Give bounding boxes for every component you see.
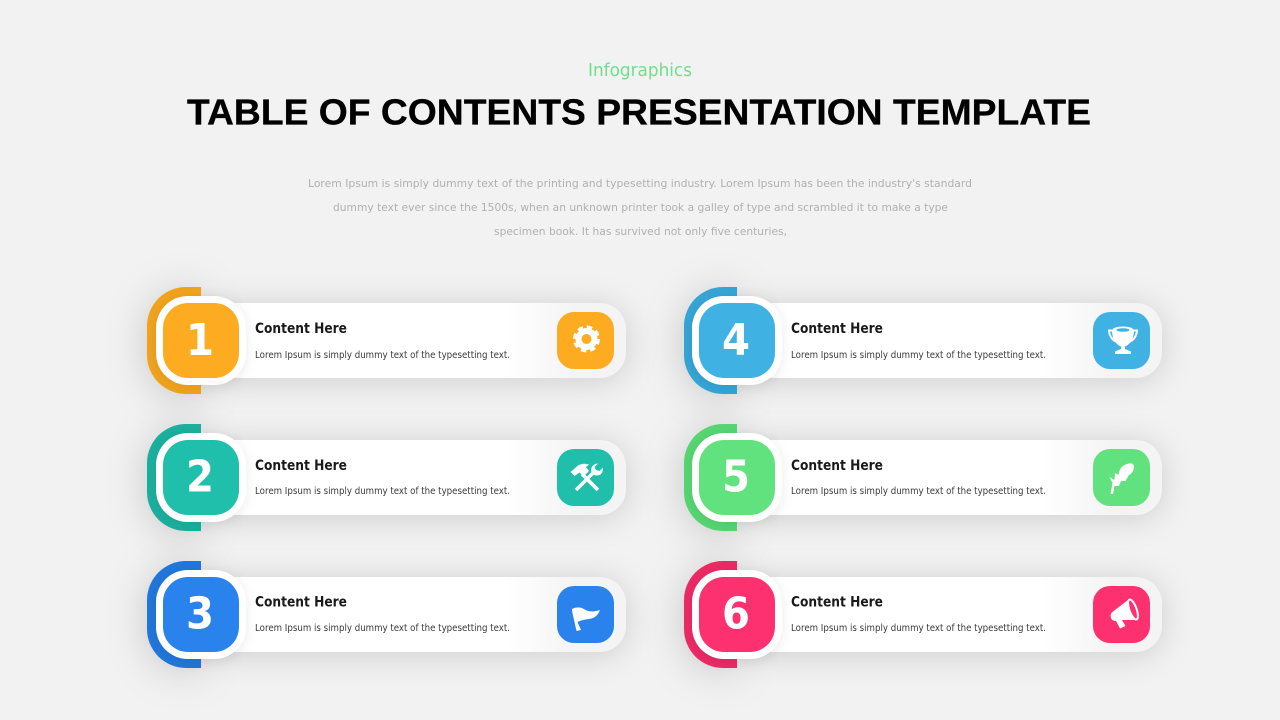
- description 2: Lorem Ipsum is simply dummy text of the typesetting text.: [255, 486, 510, 497]
- panel: item 6: [684, 561, 1162, 668]
- intro paragraph: Lorem Ipsum is simply dummy text of the printing and typesetting industry. Lorem Ipsum has been the industry's standard: [308, 177, 972, 190]
- card 6 background: [736, 577, 1162, 652]
- heading 2: Content Here: [255, 458, 347, 474]
- intro paragraph: specimen book. It has survived not only five centuries,: [494, 225, 787, 238]
- card 5 background: [736, 440, 1162, 515]
- description 4: Lorem Ipsum is simply dummy text of the typesetting text.: [791, 350, 1046, 361]
- description 1: Lorem Ipsum is simply dummy text of the typesetting text.: [255, 350, 510, 361]
- panel: item 3: [147, 561, 626, 668]
- heading 1: Content Here: [255, 321, 347, 337]
- number badge 1: [156, 296, 246, 385]
- panel: item 5: [684, 424, 1162, 531]
- intro paragraph: dummy text ever since the 1500s, when an unknown printer took a galley of type and scrambled it to make a type: [333, 201, 948, 214]
- icon: gear: [557, 312, 614, 369]
- number badge 1: 1: [186, 315, 214, 366]
- card 4 background: [736, 303, 1162, 378]
- accent tab 3: [147, 561, 201, 668]
- card 3 background: [200, 577, 626, 652]
- number badge 6: [692, 570, 782, 659]
- icon: flag: [557, 586, 614, 643]
- icon: megaphone: [1093, 586, 1150, 643]
- number badge 3: 3: [186, 588, 214, 640]
- panel: item 4: [684, 287, 1162, 394]
- intro paragraph: [308, 177, 972, 238]
- heading 4: Content Here: [791, 321, 883, 337]
- number badge 4: 4: [722, 315, 750, 366]
- description 6: Lorem Ipsum is simply dummy text of the typesetting text.: [791, 623, 1046, 634]
- number badge 5: [692, 433, 782, 522]
- card 2 background: [200, 440, 626, 515]
- description 3: Lorem Ipsum is simply dummy text of the typesetting text.: [255, 623, 510, 634]
- number badge 4: [692, 296, 782, 385]
- icon: trophy: [1093, 312, 1150, 369]
- panel: item 2: [147, 424, 626, 531]
- accent tab 2: [147, 424, 201, 531]
- heading 6: Content Here: [791, 594, 883, 610]
- icon: feather: [1093, 449, 1150, 506]
- number badge 2: 2: [186, 452, 214, 502]
- accent tab 5: [684, 424, 737, 531]
- number badge 3: [156, 570, 246, 659]
- accent tab 4: [684, 287, 737, 394]
- heading 5: Content Here: [791, 458, 883, 474]
- number badge 6: 6: [722, 588, 750, 640]
- number badge 2: [156, 433, 246, 522]
- accent tab 6: [684, 561, 737, 668]
- title: TABLE OF CONTENTS PRESENTATION TEMPLATE: [187, 92, 1091, 132]
- heading 3: Content Here: [255, 594, 347, 610]
- panel: item 1: [147, 287, 626, 394]
- number badge 5: 5: [722, 452, 750, 502]
- card 1 background: [200, 303, 626, 378]
- description 5: Lorem Ipsum is simply dummy text of the typesetting text.: [791, 486, 1046, 497]
- eyebrow label: Infographics: [588, 60, 692, 81]
- icon: hammer and wrench: [557, 449, 614, 506]
- accent tab 1: [147, 287, 201, 394]
